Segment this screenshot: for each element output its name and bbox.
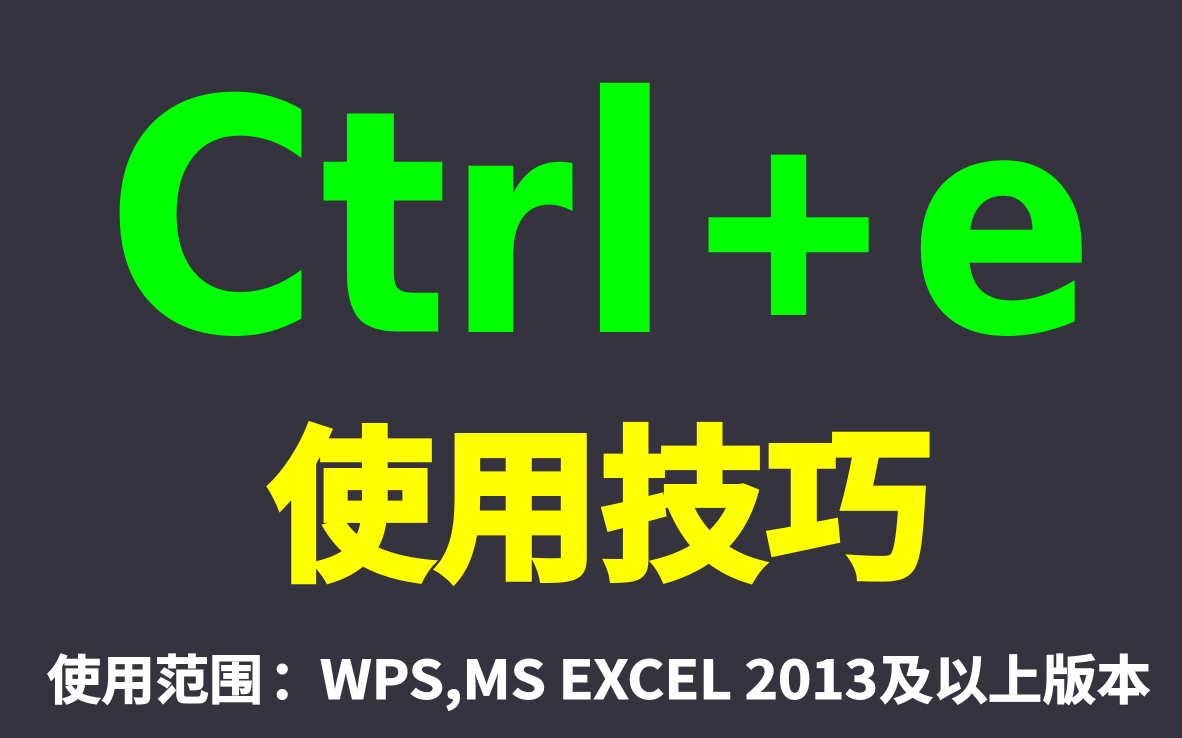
text: usage scope: 及以上版本 — [879, 639, 1151, 715]
heading: 使用技巧: 使用技巧 — [268, 417, 932, 602]
text: usage scope: 使用范围 — [47, 639, 263, 715]
title: Ctrl+e: t — [320, 44, 448, 405]
text: usage scope: WPS,MS EXCEL 2013 — [320, 639, 878, 715]
title: Ctrl+e: C — [105, 32, 320, 408]
title: Ctrl+e: l — [576, 29, 674, 410]
title: Ctrl+e: e — [909, 47, 1095, 404]
title: Ctrl+e: r — [447, 51, 575, 404]
title: Ctrl+e — [105, 29, 1095, 410]
text: usage scope — [47, 639, 1151, 715]
title: Ctrl+e: + — [686, 85, 891, 370]
text: usage scope: ： — [269, 639, 322, 715]
